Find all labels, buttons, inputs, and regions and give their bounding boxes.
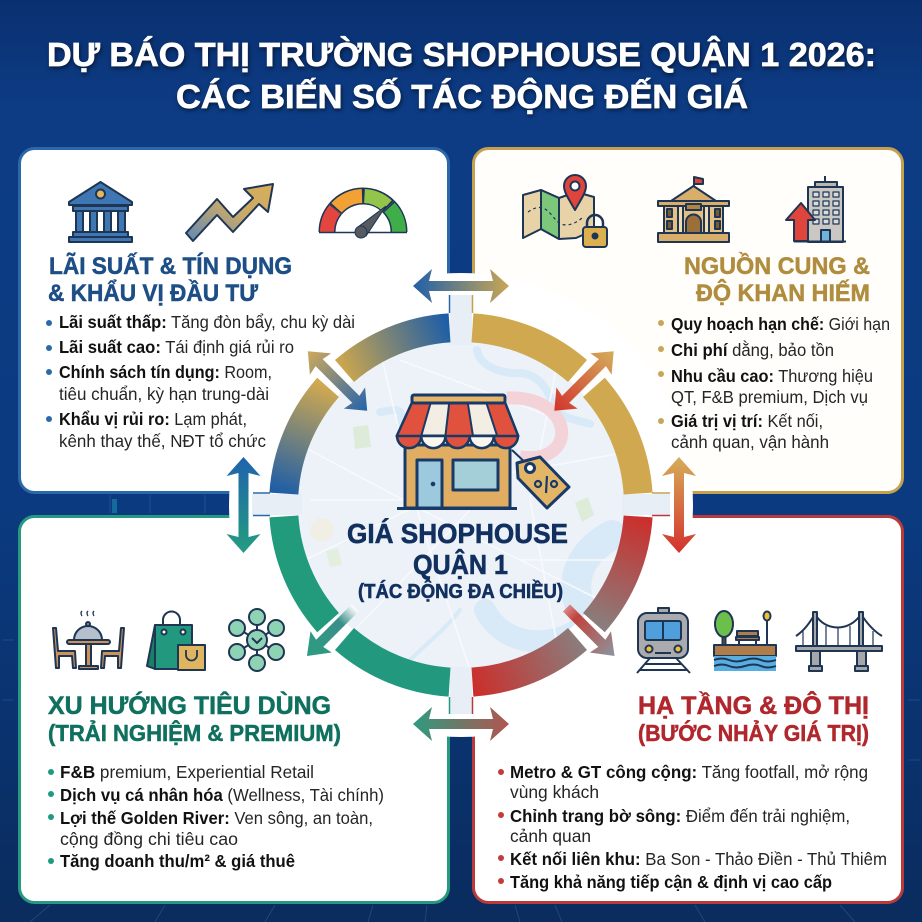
center label: [347, 518, 568, 603]
bullet list: consumption: Lợi thế Golden River: Ven sông, an toàn,: [60, 808, 373, 828]
heading: infrastructure: HẠ TẦNG & ĐÔ THỊ: [638, 690, 869, 720]
icon: wellness network: [229, 609, 284, 671]
panel: interest rates card: [20, 148, 448, 492]
bullet list: consumption: F&B premium, Experiential Retail: [60, 762, 314, 782]
icon: shopping bags: [147, 612, 205, 670]
icon: metro train: [637, 608, 690, 673]
circular ring: [284, 328, 638, 682]
arrow: left two-way: [226, 457, 260, 553]
bullet list: infrastructure: vùng khách: [510, 782, 599, 802]
bullet list: supply: Chi phí dằng, bảo tồn: [671, 339, 834, 360]
icon: map pin and lock: [523, 175, 607, 247]
bullet list: supply: [658, 314, 890, 452]
bullet list: interest rates: Lãi suất cao: Tái định giá rủi ro: [59, 337, 294, 357]
bullet list: consumption: [48, 762, 384, 871]
heading: infrastructure: [638, 690, 869, 746]
center label: QUẬN 1: [413, 549, 508, 580]
panel: consumption card: [20, 516, 448, 902]
heading: supply: NGUỒN CUNG &: [684, 252, 870, 280]
title: DỰ BÁO THỊ TRƯỜNG SHOPHOUSE QUẬN 1 2026:: [47, 36, 876, 73]
center label: GIÁ SHOPHOUSE: [347, 518, 568, 549]
icon: risk gauge: [319, 196, 407, 238]
icon: tower with red up arrow: [786, 176, 846, 242]
panel: infrastructure card: [474, 516, 902, 902]
bullet list: consumption: cộng đồng chi tiêu cao: [60, 829, 238, 849]
bullet list: interest rates: tiêu chuẩn, kỳ hạn trung-dài: [59, 384, 269, 404]
icon: shophouse with price tag: [397, 395, 569, 508]
icon: suspension bridge: [796, 612, 882, 671]
arrow: diagonal top-right: [544, 341, 624, 421]
title: [47, 36, 876, 115]
heading: consumption: (TRẢI NGHIỆM & PREMIUM): [48, 718, 341, 746]
heading: interest rates: LÃI SUẤT & TÍN DỤNG: [49, 252, 292, 280]
bullet list: supply: Quy hoạch hạn chế: Giới hạn: [671, 314, 890, 334]
bullet list: interest rates: Khẩu vị rủi ro: Lạm phát,: [59, 409, 247, 429]
heading: supply: [684, 252, 870, 307]
bullet list: infrastructure: Kết nối liên khu: Ba Son - Thảo Điền - Thủ Thiêm: [510, 849, 887, 869]
icon: dining table: [53, 611, 124, 669]
central city map: [296, 340, 640, 670]
panel: supply card: [474, 148, 902, 492]
bullet list: infrastructure: Metro & GT công cộng: Tăng footfall, mở rộng: [510, 762, 868, 782]
arrow: diagonal bottom-left: [296, 597, 366, 667]
central white backing: [229, 273, 693, 737]
title: CÁC BIẾN SỐ TÁC ĐỘNG ĐẾN GIÁ: [176, 77, 748, 115]
arrow: diagonal top-left: [297, 341, 378, 421]
arrow: diagonal bottom-right: [556, 597, 625, 667]
bullet list: supply: QT, F&B premium, Dịch vụ: [671, 387, 868, 407]
icon: bank: [69, 182, 132, 242]
heading: interest rates: [48, 252, 292, 307]
bullet list: infrastructure: [498, 762, 887, 892]
heading: consumption: XU HƯỚNG TIÊU DÙNG: [48, 690, 331, 720]
arrow: right two-way: [662, 457, 696, 553]
bullet list: infrastructure: Chỉnh trang bờ sông: Điểm đến trải nghiệm,: [510, 806, 850, 826]
icon: heritage palace: [658, 177, 729, 242]
bullet list: interest rates: Lãi suất thấp: Tăng đòn bẩy, chu kỳ dài: [59, 312, 355, 332]
bullet list: supply: Nhu cầu cao: Thương hiệu: [671, 366, 873, 386]
bullet list: infrastructure: Tăng khả năng tiếp cận & định vị cao cấp: [510, 872, 832, 892]
arrow: top two-way: [413, 269, 509, 303]
bullet list: consumption: Tăng doanh thu/m² & giá thuê: [60, 851, 295, 871]
heading: consumption: [48, 690, 341, 746]
heading: interest rates: & KHẨU VỊ ĐẦU TƯ: [48, 279, 258, 307]
icon: riverside park: [714, 611, 776, 671]
bullet list: supply: cảnh quan, vận hành: [671, 432, 829, 452]
bullet list: interest rates: [46, 312, 355, 451]
bullet list: interest rates: Chính sách tín dụng: Room,: [59, 362, 272, 382]
bullet list: infrastructure: cảnh quan: [510, 826, 591, 846]
heading: supply: ĐỘ KHAN HIẾM: [696, 279, 870, 307]
icon: rising arrow: [186, 184, 273, 241]
bullet list: consumption: Dịch vụ cá nhân hóa (Wellness, Tài chính): [60, 785, 384, 805]
heading: infrastructure: (BƯỚC NHẢY GIÁ TRỊ): [638, 718, 869, 746]
bullet list: supply: Giá trị vị trí: Kết nối,: [671, 411, 823, 431]
connector bars: [252, 295, 670, 714]
arrow: bottom two-way: [413, 707, 509, 741]
bullet list: interest rates: kênh thay thế, NĐT tổ chức: [59, 431, 266, 451]
center label: (TÁC ĐỘNG ĐA CHIỀU): [358, 579, 563, 603]
